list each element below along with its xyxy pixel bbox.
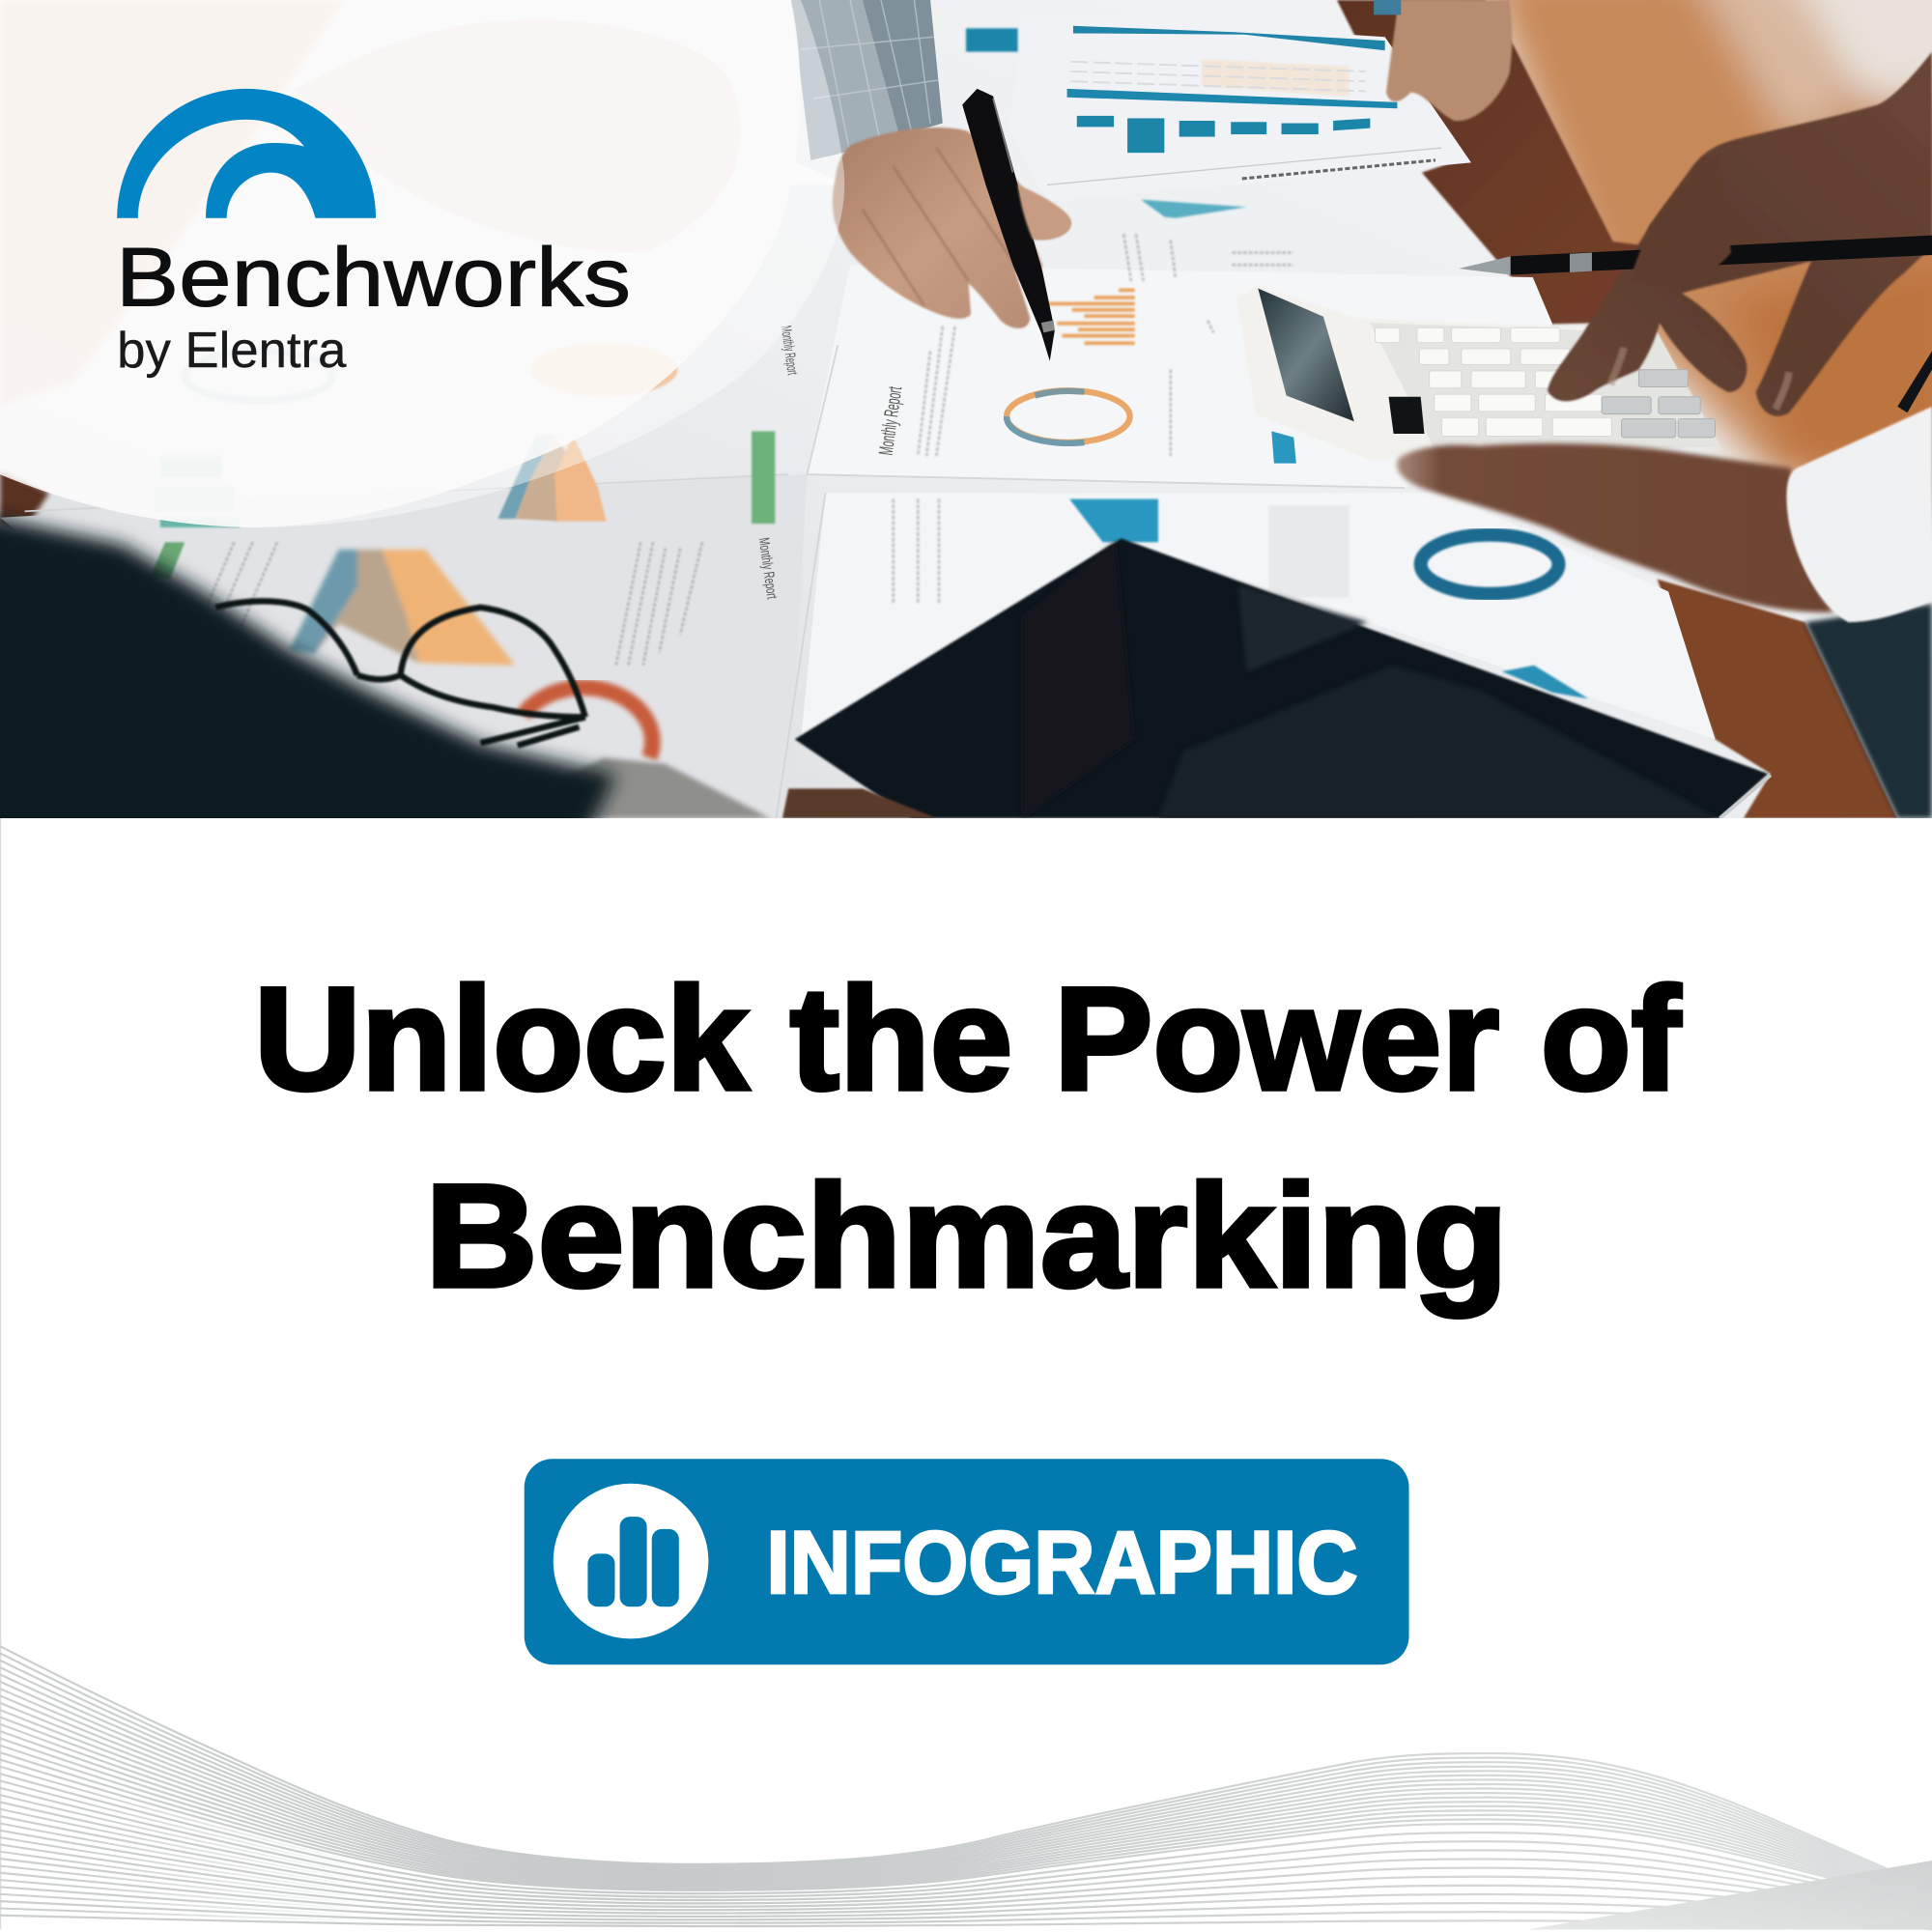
- translucent white lens, outer: [0, 0, 844, 527]
- printed report titles: Monthly Report: [876, 385, 906, 457]
- blue diamond chart: [1141, 200, 1247, 218]
- black ballpoint pen: [1459, 236, 1932, 274]
- calculator body: [1237, 286, 1720, 461]
- blue header strips: [1073, 26, 1385, 50]
- extra wave lines fading out at far left: [0, 1767, 1932, 1929]
- calculator: [1237, 286, 1720, 464]
- faint charts under the white lens: [154, 343, 678, 527]
- teal funnel: [1069, 499, 1158, 542]
- badge label: INFOGRAPHIC: [766, 1514, 1358, 1612]
- black pen: [962, 89, 1055, 361]
- grey glasses rest: [542, 757, 770, 818]
- top hand holding sheet: [1386, 0, 1512, 121]
- lower hand under calculator: [1397, 443, 1834, 612]
- tablet rim: [1720, 775, 1771, 818]
- title: [254, 958, 1681, 1319]
- calculator screen: [1258, 288, 1354, 421]
- printed report titles: Monthly Report: [778, 325, 801, 376]
- tablet: [795, 538, 1771, 818]
- keypad bed: [1370, 323, 1720, 451]
- lower left sheet: [0, 516, 40, 531]
- translucent white lens, inner: [0, 0, 800, 527]
- logo byline: by Elentra: [117, 323, 347, 379]
- dark blurred sleeve corner: [0, 513, 616, 838]
- title line 1: Unlock the Power of: [254, 958, 1681, 1122]
- wooden table edge, bottom right: [1658, 579, 1897, 818]
- hero photo: team reviewing printed reports: [0, 0, 1932, 838]
- glasses: [215, 601, 585, 746]
- blue block on back sheet: [966, 28, 1018, 52]
- body text lines on sheets: [197, 234, 1293, 666]
- index finger over pen: [1629, 154, 1731, 291]
- table sliver under tablet: [782, 788, 936, 818]
- badge background: [525, 1459, 1409, 1664]
- far finger strap: [1897, 352, 1932, 412]
- shirt sleeve, plaid: [791, 0, 943, 160]
- white shirt cuff: [1786, 407, 1932, 622]
- logo wordmark: Benchworks: [116, 230, 631, 324]
- white pen: [777, 154, 848, 185]
- green table column: [752, 431, 775, 524]
- thumb over pen: [1018, 185, 1070, 240]
- blurred orange floor: [1479, 0, 1932, 518]
- faint table rows: [1070, 62, 1365, 91]
- upper funnel chart: [497, 435, 607, 522]
- bar chart: [1077, 116, 1370, 153]
- solar panel: [1389, 397, 1424, 434]
- tablet reflection: [1238, 585, 1368, 671]
- decorative grey wave lines: [0, 1646, 1932, 1929]
- keys: [1375, 327, 1611, 437]
- printed report titles: [755, 325, 906, 601]
- blue arc under tablet: [1502, 666, 1588, 698]
- category tag: [1271, 431, 1296, 464]
- lower right report sheet: [801, 493, 1716, 739]
- right hand: [1548, 52, 1932, 416]
- donut: actual summary: [1007, 390, 1130, 443]
- dark floor corner: [1805, 604, 1932, 818]
- table tint: [1202, 59, 1350, 96]
- logo: Benchworks by Elentra: [116, 89, 631, 379]
- middle report sheet: [807, 265, 1552, 488]
- orange-red donut fragment: [524, 688, 652, 757]
- cuff top: [1374, 0, 1401, 14]
- faded grid table on sheet: [1269, 505, 1350, 598]
- left hand with pen: [833, 128, 1070, 328]
- lower funnel chart: [290, 550, 515, 666]
- paper edges: [25, 345, 1405, 818]
- paper desk background: [0, 0, 1932, 818]
- dark wood sliver left: [0, 469, 49, 529]
- infographic badge: [525, 1459, 1409, 1664]
- printed report titles: Monthly Report: [755, 537, 781, 601]
- nail highlights: [1610, 348, 1789, 409]
- shaded keys: [1602, 370, 1716, 438]
- knuckle shadows: [863, 148, 1018, 305]
- orange bar chart: [1048, 288, 1135, 345]
- report sheet with blue bars: [1047, 25, 1471, 185]
- icon: bar chart in circle: [554, 1484, 708, 1638]
- warm tint at lens top left: [0, 0, 345, 407]
- blue donut: [1421, 535, 1559, 594]
- wave wedge bottom right: [1528, 1861, 1932, 1929]
- ghost hand behind lens: [296, 19, 740, 252]
- left page edge hairline: [0, 818, 2, 1929]
- green column lower left: [151, 542, 185, 579]
- title line 2: Benchmarking: [425, 1155, 1508, 1319]
- logo arch mark: [117, 89, 376, 218]
- wooden table edge, top: [1337, 0, 1651, 324]
